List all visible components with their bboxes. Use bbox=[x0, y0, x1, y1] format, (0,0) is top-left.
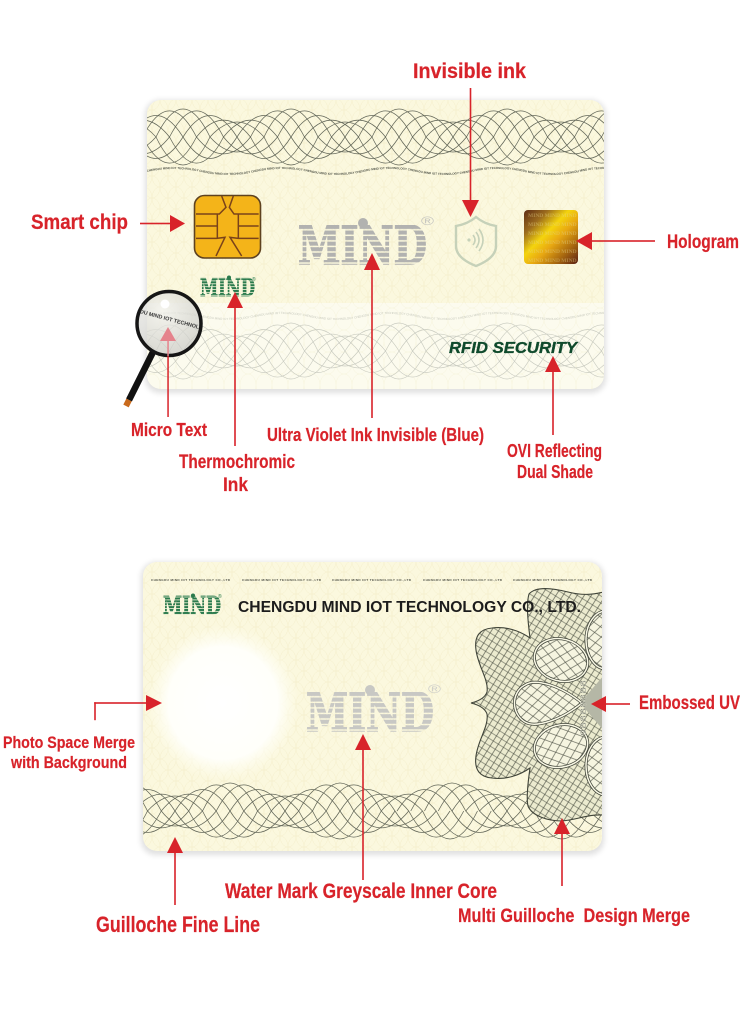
RFID security text: RFID SECURITY bbox=[449, 340, 578, 357]
arrow: thermochromic bbox=[227, 292, 243, 446]
label: ultra violet ink: Ultra Violet Ink Invisible (Blue) bbox=[267, 425, 484, 445]
logo: small green MIND: MIND bbox=[200, 273, 255, 302]
icon: hologram: MIND MIND MIND bbox=[528, 240, 577, 246]
photo space bbox=[152, 631, 294, 776]
light lower strip bbox=[147, 303, 604, 389]
arrow: guilloche fine line bbox=[167, 837, 183, 905]
label: OVI reflecting dual shade: Dual Shade bbox=[517, 462, 593, 482]
logo: watermark MIND: MIND bbox=[306, 681, 434, 744]
logo: small green MIND: ® bbox=[252, 276, 256, 283]
microtext row: CHENGDU MIND IOT TECHNOLOGY CO.,LTD bbox=[332, 578, 412, 582]
label: micro text: Micro Text bbox=[131, 420, 207, 440]
panel: card front bbox=[144, 98, 608, 394]
label: smart chip: Smart chip bbox=[31, 211, 128, 234]
logo: small green MIND bbox=[200, 273, 256, 302]
label: water mark: Water Mark Greyscale Inner Core bbox=[225, 880, 497, 903]
wavy microtext line: CHENGDU MIND IOT TECHNOLOGY CHENGDU MIND IOT TECHNOLOGY CHENGDU MIND IOT TECHNOLOGY CHENGDU MIND IOT TECHNOLOGY CHENGDU MIND IOT TECHNOLOGY CHENGDU MIND IOT TECHNOLOGY CHENGDU MIND IOT TECHNOLOGY CHENGDU MIND IOT TECHNOLOGY CHENGDU MIND IOT TECHNOLOGY CHENGDU MIND IOT TECHNOLOGY bbox=[147, 166, 604, 175]
microtext row bbox=[151, 578, 593, 582]
arrow: multi guilloche bbox=[554, 818, 570, 886]
icon: hologram: MIND MIND MIND bbox=[528, 222, 577, 228]
icon: hologram: MIND MIND MIND bbox=[528, 231, 577, 237]
label: photo space: with Background bbox=[10, 753, 127, 772]
guilloche flower bbox=[470, 588, 602, 822]
microtext row: CHENGDU MIND IOT TECHNOLOGY CO.,LTD bbox=[513, 578, 593, 582]
label: photo space: Photo Space Merge bbox=[3, 733, 135, 752]
arrow: micro text bbox=[160, 327, 176, 417]
icon: RFID shield bbox=[456, 217, 496, 266]
arrow: ultra violet bbox=[364, 253, 380, 418]
logo: watermark MIND: ® bbox=[428, 682, 441, 696]
arrow: embossed UV bbox=[591, 696, 630, 712]
arrow: hologram bbox=[576, 232, 655, 250]
serial number: 98888888 bbox=[580, 680, 589, 736]
label: multi guilloche: Multi Guilloche Design Merge bbox=[458, 906, 690, 927]
microtext row: CHENGDU MIND IOT TECHNOLOGY CO.,LTD bbox=[151, 578, 231, 582]
lower wavy microtext: CHENGDU MIND IOT TECHNOLOGY CHENGDU MIND IOT TECHNOLOGY CHENGDU MIND IOT TECHNOLOGY CHENGDU MIND IOT TECHNOLOGY CHENGDU MIND IOT TECHNOLOGY CHENGDU MIND IOT TECHNOLOGY CHENGDU MIND IOT TECHNOLOGY CHENGDU MIND IOT TECHNOLOGY CHENGDU MIND IOT TECHNOLOGY CHENGDU MIND IOT TECHNOLOGY bbox=[147, 312, 604, 320]
icon: hologram bbox=[524, 210, 578, 264]
icon: hologram: MIND MIND MIND bbox=[528, 249, 577, 255]
label: guilloche fine line: Guilloche Fine Line bbox=[96, 912, 260, 937]
icon: smart chip bbox=[194, 196, 260, 258]
lower guilloche band bbox=[147, 322, 604, 380]
logo: grey UV MIND: MIND bbox=[298, 214, 427, 277]
icon: hologram: MIND MIND MIND bbox=[528, 213, 577, 219]
logo: green MIND: MIND bbox=[163, 591, 221, 620]
microtext row: CHENGDU MIND IOT TECHNOLOGY CO.,LTD bbox=[242, 578, 322, 582]
arrow: photo space bbox=[94, 695, 162, 720]
company name: CHENGDU MIND IOT TECHNOLOGY CO., LTD. bbox=[238, 599, 581, 616]
icon: magnifier bbox=[126, 292, 201, 406]
label: thermochromic ink: Thermochromic bbox=[179, 452, 295, 473]
top guilloche band bbox=[147, 108, 604, 166]
logo: green MIND: ® bbox=[218, 593, 222, 600]
panel: card back bbox=[140, 560, 606, 856]
label: OVI reflecting dual shade: OVI Reflecting bbox=[507, 441, 602, 461]
arrow: smart chip bbox=[140, 215, 185, 232]
label: invisible ink: Invisible ink bbox=[413, 60, 526, 83]
logo: grey UV MIND: ® bbox=[421, 214, 434, 228]
arrow: watermark bbox=[355, 734, 371, 880]
bottom guilloche band bbox=[143, 782, 602, 840]
label: thermochromic ink: Ink bbox=[223, 475, 248, 496]
arrow: invisible ink bbox=[462, 88, 479, 217]
icon: hologram: MIND MIND MIND bbox=[528, 258, 577, 264]
icon: magnifier: DU MIND IOT TECHNOL bbox=[139, 309, 200, 331]
microtext row: CHENGDU MIND IOT TECHNOLOGY CO.,LTD bbox=[423, 578, 503, 582]
arrow: OVI bbox=[545, 356, 561, 435]
